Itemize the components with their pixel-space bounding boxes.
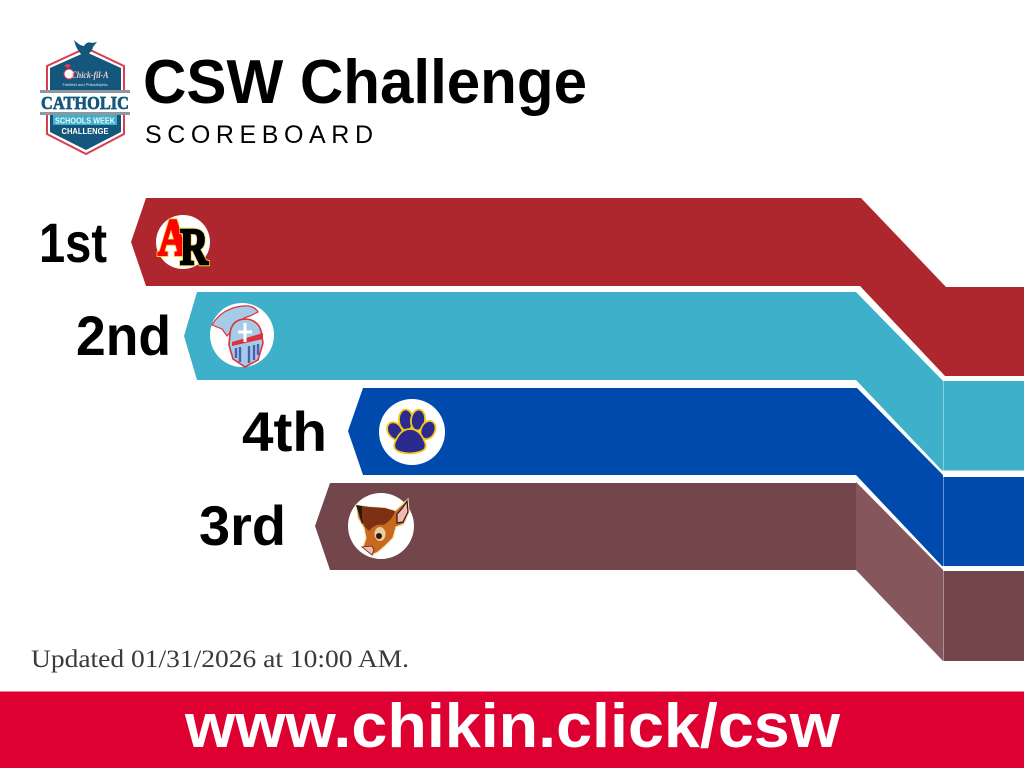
logo: Catholic Schools Week Challenge badge: Fairfield and Philadelphia xyxy=(63,82,108,87)
icon: AR school logo: A xyxy=(158,210,188,267)
icon: AR school logo: R xyxy=(180,219,209,276)
icon: AR school logo: A xyxy=(158,210,188,267)
footer banner: www.chikin.click/csw xyxy=(184,692,841,761)
footer banner xyxy=(0,692,1024,768)
rank: 2nd: 2nd xyxy=(76,304,171,367)
logo: Catholic Schools Week Challenge badge: Chick-fil-A xyxy=(72,71,108,81)
logo: Catholic Schools Week Challenge badge: SCHOOLS WEEK xyxy=(55,116,116,126)
logo: Catholic Schools Week Challenge badge: CATHOLIC xyxy=(41,93,129,113)
icon: knight school logo xyxy=(210,303,274,367)
rank: 4th: 4th xyxy=(242,400,327,463)
icon: fawn school logo xyxy=(348,493,414,559)
icon: AR school logo xyxy=(156,210,210,276)
panel: 1st place ribbon xyxy=(131,198,1024,376)
panel: 4th place ribbon xyxy=(348,388,1024,566)
logo: Catholic Schools Week Challenge badge: CHALLENGE xyxy=(62,126,109,136)
text: update timestamp: Updated 01/31/2026 at 10:00 AM. xyxy=(31,646,409,673)
title: CSW Challenge xyxy=(143,48,587,117)
logo: Catholic Schools Week Challenge badge xyxy=(38,40,132,154)
rank: 1st: 1st xyxy=(39,211,107,274)
subtitle: SCOREBOARD xyxy=(145,121,373,149)
icon: AR school logo: R xyxy=(180,219,209,276)
panel: 2nd place ribbon xyxy=(184,292,1024,470)
panel: 3rd place ribbon xyxy=(315,482,1024,661)
icon: paw school logo xyxy=(379,399,445,465)
rank: 3rd: 3rd xyxy=(199,494,286,557)
